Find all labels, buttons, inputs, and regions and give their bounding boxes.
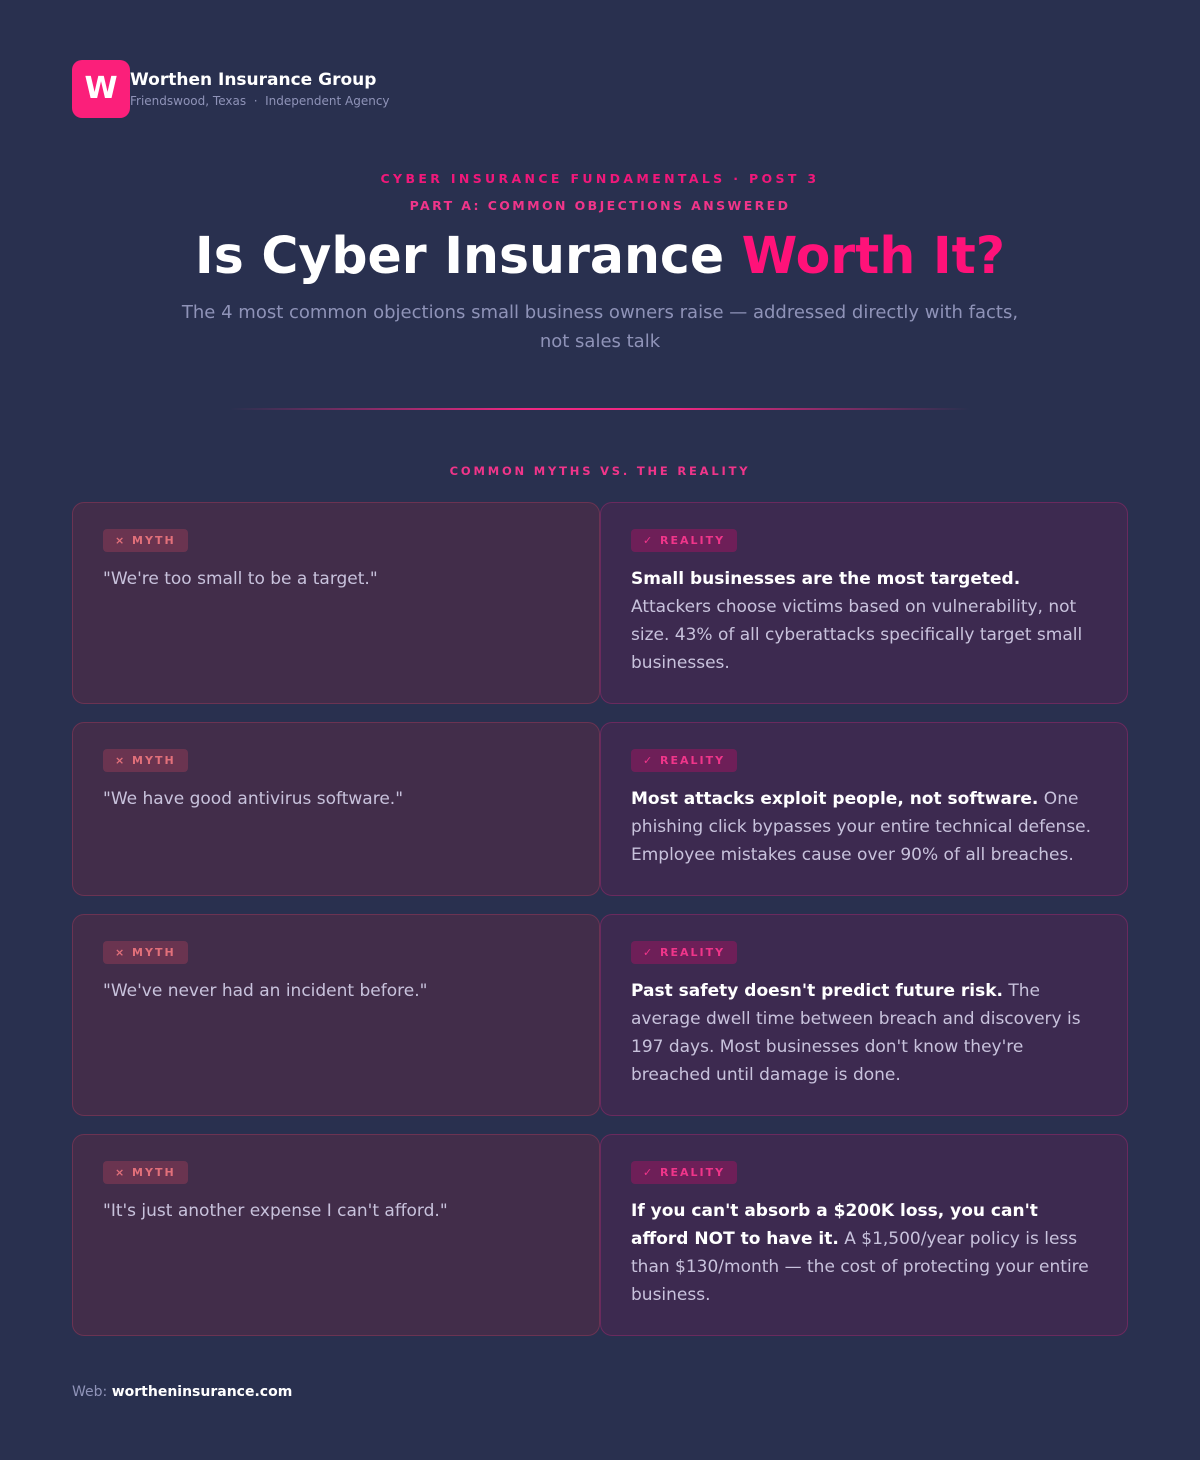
subtitle: The 4 most common objections small business owners raise — addressed directly with facts, not sales talk — [182, 302, 1018, 352]
reality 2: ✓ REALITY — [643, 754, 725, 767]
brand name: Worthen Insurance Group — [130, 70, 376, 90]
myth 3 — [72, 914, 600, 1116]
logo — [72, 60, 130, 118]
brand name: Friendswood, Texas · Independent Agency — [130, 94, 390, 108]
brand name — [130, 70, 390, 108]
eyebrow: CYBER INSURANCE FUNDAMENTALS · POST 3 — [381, 171, 819, 186]
myth 2: "We have good antivirus software." — [103, 789, 403, 809]
reality 2 — [600, 722, 1128, 896]
reality 3 — [600, 914, 1128, 1116]
myth 1: × MYTH — [115, 534, 176, 547]
divider — [230, 408, 970, 410]
myth 3: × MYTH — [115, 946, 176, 959]
reality 1: Small businesses are the most targeted. Attackers choose victims based on vulnerability, not size. 43% of all cyberattacks specifically target small businesses. — [631, 569, 1082, 673]
reality 1 — [600, 502, 1128, 704]
reality 1: ✓ REALITY — [643, 534, 725, 547]
myth 2 — [72, 722, 600, 896]
myth 4 — [72, 1134, 600, 1336]
myth 1 — [72, 502, 600, 704]
section heading: COMMON MYTHS VS. THE REALITY — [450, 464, 750, 478]
reality 3: ✓ REALITY — [643, 946, 725, 959]
reality 4: If you can't absorb a $200K loss, you can't afford NOT to have it. A $1,500/year policy is less than $130/month — the cost of protecting your entire business. — [631, 1201, 1089, 1305]
footer: Web: wortheninsurance.com — [72, 1384, 292, 1400]
logo: W — [84, 71, 118, 106]
reality 3: Past safety doesn't predict future risk. The average dwell time between breach and discovery is 197 days. Most businesses don't know they're breached until damage is done. — [631, 981, 1081, 1085]
reality 4: ✓ REALITY — [643, 1166, 725, 1179]
myth 4: "It's just another expense I can't afford." — [103, 1201, 448, 1221]
title: Is Cyber Insurance Worth It? — [195, 226, 1005, 285]
myth 3: "We've never had an incident before." — [103, 981, 427, 1001]
myth 4: × MYTH — [115, 1166, 176, 1179]
myth 1: "We're too small to be a target." — [103, 569, 378, 589]
sub eyebrow: PART A: COMMON OBJECTIONS ANSWERED — [410, 198, 790, 213]
myth 2: × MYTH — [115, 754, 176, 767]
reality 4 — [600, 1134, 1128, 1336]
reality 2: Most attacks exploit people, not software. One phishing click bypasses your entire technical defense. Employee mistakes cause over 90% of all breaches. — [631, 789, 1091, 865]
